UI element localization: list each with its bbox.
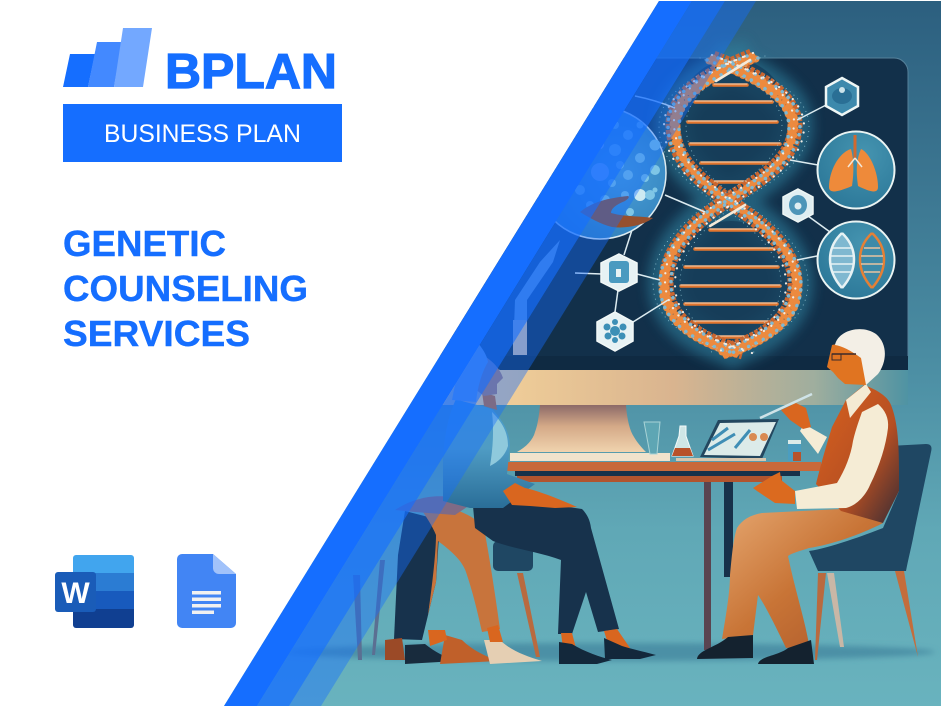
keyboard (510, 453, 670, 461)
cup (788, 440, 801, 461)
hexagon icon: middle (783, 189, 813, 222)
second person's shoes (385, 625, 542, 664)
monitor screen (440, 58, 908, 370)
man's far arm and hand with pen (760, 394, 827, 454)
title: GENETIC (63, 223, 226, 264)
title (63, 223, 308, 354)
DNA glow (666, 56, 795, 352)
cell dots (571, 121, 660, 219)
cell magnification circle (534, 107, 666, 239)
woman's chair (353, 541, 540, 660)
business plan banner (63, 104, 342, 162)
business plan banner: BUSINESS (104, 120, 229, 148)
connector lines (575, 96, 830, 322)
raised sleeve behind the band (513, 240, 560, 355)
glass (644, 422, 660, 454)
man's vest (816, 385, 899, 523)
monitor chin (440, 370, 908, 405)
icon: Google Docs (177, 554, 236, 628)
woman's sweater (443, 399, 535, 508)
DNA core tint (669, 59, 793, 349)
second person's trousers (394, 496, 500, 640)
title: COUNSELING (63, 268, 308, 309)
illustration: genetic counseling scene (200, 0, 944, 708)
icon: Microsoft Word: W (61, 577, 90, 610)
floor shadow (285, 643, 935, 661)
man's trousers (722, 509, 883, 648)
logo (63, 28, 337, 99)
man's near arm (795, 404, 888, 509)
DNA rungs (681, 84, 780, 337)
man's collar (846, 384, 871, 418)
tablet (676, 419, 779, 461)
woman's ankles and shoes (559, 629, 656, 664)
logo bars (63, 28, 152, 87)
DNA double helix strands (653, 53, 809, 355)
DNA white highlights (710, 60, 750, 226)
hexagon icon: top right (826, 78, 858, 115)
circle icon: lungs (818, 132, 894, 208)
circle icon: DNA comparison (818, 222, 894, 298)
business plan banner: PLAN (236, 120, 301, 148)
logo wordmark: BPLAN (165, 45, 337, 99)
woman's trousers (473, 498, 619, 634)
man's head (827, 329, 885, 385)
man's chair (809, 444, 931, 660)
title: SERVICES (63, 313, 250, 354)
diagonal band: translucent outer (289, 1, 756, 706)
woman's sweater highlight (490, 412, 508, 466)
woman's hands (503, 483, 577, 508)
table (507, 462, 821, 650)
man's shoes (697, 635, 814, 664)
hexagon icon: lower left 1 (601, 254, 637, 291)
icon: Microsoft Word (55, 555, 134, 628)
flask (672, 426, 693, 456)
hand under the cell circle (580, 196, 653, 227)
diagonal band: translucent middle (257, 1, 725, 706)
scene background (200, 0, 944, 708)
woman's head and hair (452, 343, 503, 410)
diagonal band: solid inner (224, 1, 692, 706)
monitor stand (517, 405, 646, 452)
hexagon icon: lower left 2 (597, 312, 633, 351)
man's lower hand (753, 472, 795, 504)
